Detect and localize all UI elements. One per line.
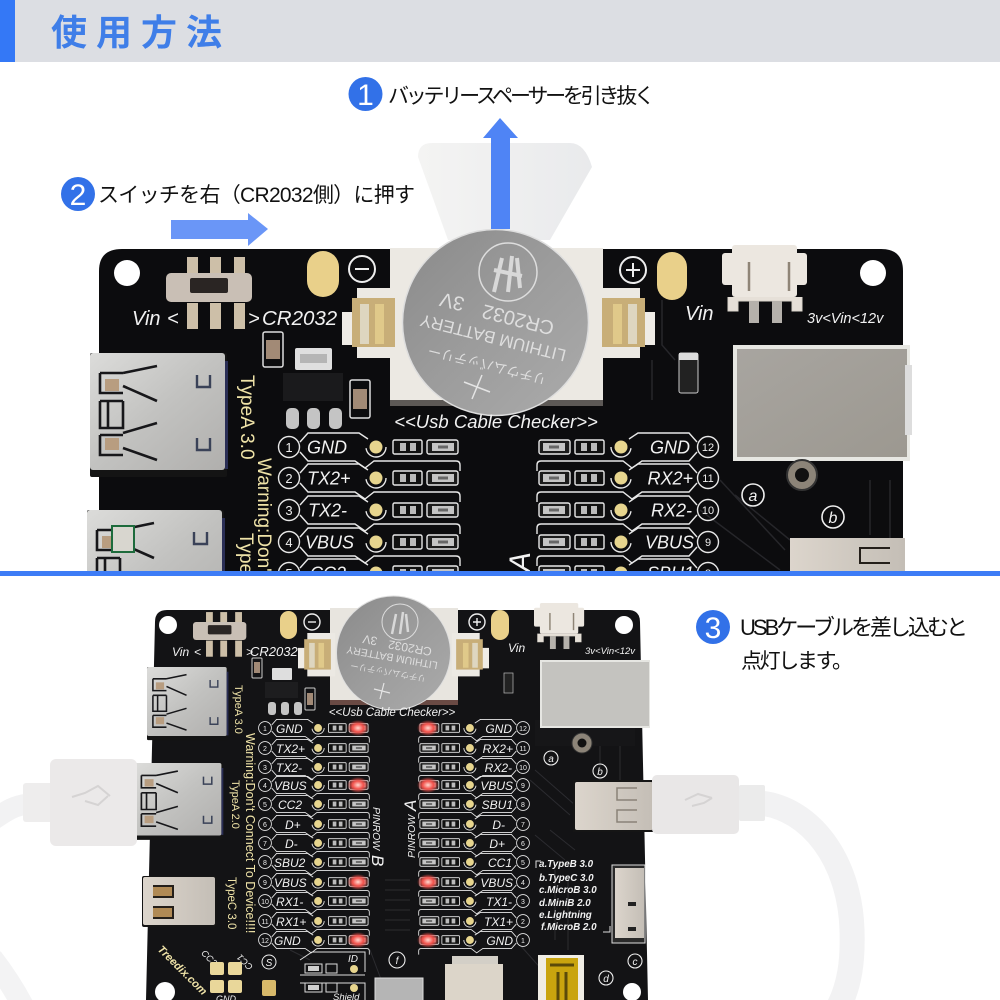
step 2 callout: 2 xyxy=(70,179,86,212)
left pin rows: RX1+ xyxy=(276,915,306,929)
right pin rows: RX2+ xyxy=(647,468,693,488)
board traces xyxy=(290,740,620,990)
left pin rows: TX2- xyxy=(276,761,302,775)
battery spacer pull tab xyxy=(418,143,592,240)
switch labels: Vin xyxy=(132,308,161,330)
regulator and small parts xyxy=(263,332,698,429)
right pin rows: 9 xyxy=(521,783,525,790)
USB type A 2.0 port with plug xyxy=(135,763,223,840)
left pin rows: 10 xyxy=(261,899,269,906)
vertical silkscreen labels: Warning:Don't Connect To Device!!!! xyxy=(243,733,257,933)
USB type C 3.0 port xyxy=(142,876,217,927)
left pin rows: GND xyxy=(276,722,303,736)
left pin rows: 3 xyxy=(285,503,293,518)
right pin rows: D- xyxy=(492,818,505,832)
connector legend: d.MiniB 2.0 xyxy=(539,898,591,909)
right pin rows: RX2+ xyxy=(483,742,513,756)
vin connector xyxy=(534,603,584,649)
switch labels: CR2032 xyxy=(250,644,298,659)
left pin rows: 9 xyxy=(263,880,267,887)
vin labels: 3v<Vin<12v xyxy=(807,311,884,327)
blue divider xyxy=(0,571,1000,576)
USB type A 3.0 port xyxy=(147,667,228,740)
right pin rows: 10 xyxy=(702,505,714,517)
connector legend: f.MicroB 2.0 xyxy=(541,922,597,933)
vertical silkscreen labels xyxy=(235,375,537,763)
right pin rows: 7 xyxy=(521,822,525,829)
right pin rows: 6 xyxy=(521,841,525,848)
right pin rows: 1 xyxy=(521,938,525,945)
header band xyxy=(0,0,1000,62)
switch labels: CR2032 xyxy=(262,307,338,330)
left pin rows: 3 xyxy=(263,765,267,772)
left pin rows: 5 xyxy=(285,566,293,581)
USB type A 3.0 port xyxy=(90,353,228,477)
left pin rows: 1 xyxy=(263,726,267,733)
step 3 callout xyxy=(696,610,968,673)
CR2032 coin cell: LITHIUM BATTERY xyxy=(346,643,439,671)
ID and shield pads xyxy=(300,952,365,1000)
lit LEDs right xyxy=(417,720,439,948)
vertical silkscreen labels: Warning:Don't Connect To Device!!!! xyxy=(253,458,274,763)
pinrow labels: PINROW xyxy=(370,807,382,851)
vertical silkscreen labels: TypeA 3.0 xyxy=(232,685,244,734)
CR2032 coin cell: リチウムバッテリー xyxy=(426,343,548,386)
regulator and small parts xyxy=(252,658,513,715)
left pin rows: TX2- xyxy=(308,500,347,520)
left pin rows: VBUS xyxy=(274,876,307,890)
bottom board photo: c xyxy=(632,957,638,968)
vin labels xyxy=(686,305,884,323)
connector legend: a.TypeB 3.0 xyxy=(539,859,594,870)
USB type A 2.0 port xyxy=(87,510,225,571)
pinrow labels: B xyxy=(368,855,387,866)
right pin rows: CC1 xyxy=(488,856,512,870)
lightning port xyxy=(445,956,503,1000)
left pin rows: CC2 xyxy=(278,798,302,812)
left pin rows: 4 xyxy=(263,783,267,790)
left pin rows: GND xyxy=(274,934,301,948)
right pin rows: D+ xyxy=(489,837,505,851)
vertical silkscreen labels: A xyxy=(504,552,537,574)
bottom board photo: a xyxy=(548,754,554,765)
ID and shield pads: ID xyxy=(348,954,358,965)
CR2032 coin cell xyxy=(402,230,588,416)
left pin rows: 11 xyxy=(261,919,269,926)
switch labels xyxy=(173,647,298,656)
vin labels: Vin xyxy=(685,303,714,325)
connector legend: e.Lightning xyxy=(539,910,592,921)
right pin rows: TX1+ xyxy=(484,915,513,929)
left pin rows: 7 xyxy=(263,841,267,848)
board traces xyxy=(652,300,890,570)
CR2032 coin cell: リチウムバッテリー xyxy=(349,660,427,684)
left pin rows: CC2 xyxy=(310,564,346,584)
polarity marks xyxy=(349,256,646,283)
bottom board photo: f xyxy=(396,956,400,967)
right USB cable xyxy=(652,775,852,1000)
right pin rows: 2 xyxy=(521,919,525,926)
right pin rows xyxy=(417,719,529,955)
bottom board photo: d xyxy=(603,974,609,985)
micro B 3.0 port xyxy=(612,865,645,943)
switch labels: < xyxy=(167,308,179,330)
right pin rows: SBU1 xyxy=(647,564,694,584)
pinrow labels: PINROW xyxy=(406,814,418,858)
right pin rows: 12 xyxy=(519,726,527,733)
lower left markings: Treedix.com xyxy=(155,944,209,998)
lit LEDs left xyxy=(347,720,369,948)
left pin rows: 5 xyxy=(263,802,267,809)
right pin rows: GND xyxy=(485,722,512,736)
right pin rows: RX2- xyxy=(651,500,692,520)
switch labels xyxy=(134,310,337,325)
right pin rows: 5 xyxy=(521,860,525,867)
right pin rows xyxy=(536,432,720,571)
battery holder xyxy=(342,248,655,406)
switch labels: > xyxy=(246,645,253,659)
solder pads xyxy=(280,610,509,640)
left pin rows: D- xyxy=(285,837,298,851)
vertical silkscreen labels: TypeA 2.0 xyxy=(235,533,256,618)
left pin rows: 2 xyxy=(285,471,293,486)
battery holder xyxy=(298,608,489,705)
left pin rows xyxy=(259,719,369,955)
right pin rows: 11 xyxy=(702,473,714,485)
USB type C port b xyxy=(573,780,653,832)
vin labels: 3v<Vin<12v xyxy=(585,646,636,657)
lower left markings: S xyxy=(266,958,273,969)
right pin rows: GND xyxy=(486,934,513,948)
right pin rows: VBUS xyxy=(480,876,513,890)
switch labels: > xyxy=(248,308,260,330)
connector legend xyxy=(536,859,610,933)
right pin rows: TX1- xyxy=(486,895,512,909)
CR2032 coin cell xyxy=(336,596,450,710)
pcb xyxy=(99,249,903,600)
step 3 callout: 3 xyxy=(705,612,721,645)
left pin rows: 2 xyxy=(263,746,267,753)
micro B 2.0 port xyxy=(375,978,423,1000)
left pin rows: RX1- xyxy=(276,895,303,909)
left pin rows: VBUS xyxy=(274,779,307,793)
connector markers xyxy=(742,484,844,528)
left pin rows: 8 xyxy=(263,860,267,867)
right pin rows: 10 xyxy=(519,765,527,772)
mounting holes xyxy=(114,260,886,286)
top board photo: a xyxy=(749,488,758,505)
right pin rows: VBUS xyxy=(645,532,694,552)
vin labels: Vin xyxy=(508,641,525,655)
CR2032 coin cell: LITHIUM BATTERY xyxy=(418,310,568,365)
checker label: <<Usb Cable Checker>> xyxy=(329,707,456,719)
CR2032 coin cell: CR2032 xyxy=(480,299,557,339)
pinrow labels xyxy=(368,800,420,866)
step 1 callout: バッテリースペーサーを引き抜く xyxy=(388,85,655,108)
left pin rows: TX2+ xyxy=(307,468,351,488)
right pin rows: 12 xyxy=(702,442,714,454)
lower left markings: CC1 xyxy=(235,952,255,972)
left pin rows: D+ xyxy=(285,818,301,832)
top board photo xyxy=(87,118,912,571)
CR2032 coin cell: CR2032 xyxy=(387,637,433,659)
vin labels xyxy=(509,643,636,654)
right pin rows: 9 xyxy=(705,537,711,549)
bottom board photo xyxy=(0,596,852,1000)
switch labels: Vin xyxy=(172,645,189,659)
pull arrow xyxy=(483,118,518,229)
solder pads xyxy=(307,251,687,300)
pcb xyxy=(146,610,648,1000)
slide switch xyxy=(193,612,246,657)
left pin rows: TX2+ xyxy=(276,742,305,756)
right pin rows: 8 xyxy=(521,802,525,809)
step 3 callout: 点灯します。 xyxy=(741,650,853,673)
left pin rows: SBU2 xyxy=(274,856,306,870)
bottom board photo: b xyxy=(597,767,603,778)
connector legend: b.TypeC 3.0 xyxy=(539,873,594,884)
USB type B port xyxy=(535,660,650,753)
right pin rows: 4 xyxy=(521,880,525,887)
connector markers xyxy=(389,751,642,985)
step 3 callout: USBケーブルを差し込むと xyxy=(740,615,968,640)
left pin rows: 12 xyxy=(261,938,269,945)
step 1 callout: 1 xyxy=(357,79,374,112)
right pin rows: 3 xyxy=(521,899,525,906)
connector legend: c.MicroB 3.0 xyxy=(539,885,597,896)
left pin rows xyxy=(278,432,461,571)
step 2 callout xyxy=(61,177,415,212)
slide switch xyxy=(166,257,252,329)
right pin rows: 11 xyxy=(519,746,527,753)
left pin rows: GND xyxy=(307,438,347,458)
step 1 callout xyxy=(348,77,655,112)
switch labels: < xyxy=(194,645,201,659)
left USB cable xyxy=(0,759,137,1000)
pinrow labels: A xyxy=(401,800,420,812)
mini B port xyxy=(538,955,584,1000)
left pin rows: VBUS xyxy=(305,532,354,552)
left pin rows: 1 xyxy=(285,440,293,455)
checker label: <<Usb Cable Checker>> xyxy=(394,411,598,432)
vertical silkscreen labels: TypeC 3.0 xyxy=(225,877,237,929)
switch direction arrow xyxy=(171,213,268,246)
vin connector xyxy=(722,245,807,323)
right pin rows: GND xyxy=(650,438,690,458)
right pin rows: SBU1 xyxy=(482,798,513,812)
vertical silkscreen labels: TypeA 3.0 xyxy=(236,375,257,460)
lower left markings xyxy=(155,944,276,1000)
left pin rows: 6 xyxy=(263,822,267,829)
left pin rows: 4 xyxy=(285,535,293,550)
polarity marks xyxy=(304,614,485,630)
title: 使用方法 xyxy=(51,12,231,53)
top board photo: b xyxy=(829,510,838,527)
right pin rows: RX2- xyxy=(485,761,512,775)
right pin rows: 8 xyxy=(705,568,711,580)
USB type C port b xyxy=(790,538,905,571)
vertical silkscreen labels xyxy=(225,685,257,933)
CR2032 coin cell: 3V xyxy=(437,287,467,315)
vertical silkscreen labels: TypeA 2.0 xyxy=(229,780,241,829)
right pin rows: VBUS xyxy=(480,779,513,793)
mounting holes xyxy=(155,616,641,1000)
step 2 callout: スイッチを右（CR2032側）に押す xyxy=(98,184,415,207)
CR2032 coin cell: 3V xyxy=(362,632,378,648)
lower left markings: CC2 xyxy=(199,948,219,968)
USB type B port xyxy=(733,345,912,490)
